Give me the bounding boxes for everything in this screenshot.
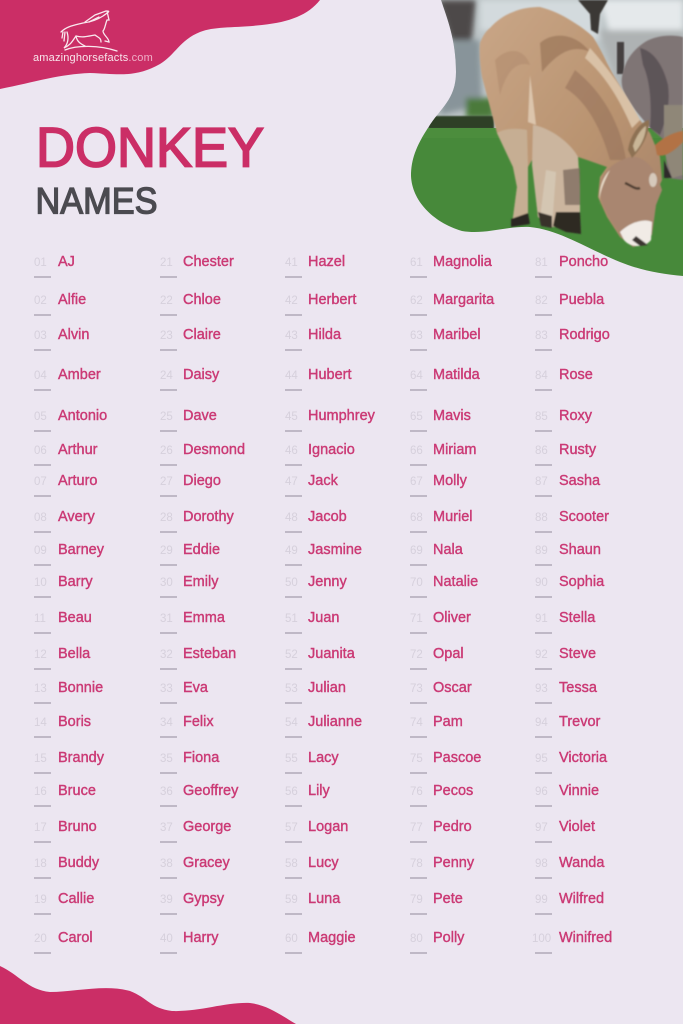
names column 3: 46 <box>285 445 298 457</box>
names column 1: Arturo <box>58 473 98 489</box>
names column 1: 20 <box>34 933 47 945</box>
names column 5: Poncho <box>559 254 608 270</box>
names column 2: Chester <box>183 254 234 270</box>
top banner <box>0 0 320 89</box>
names column 4: Opal <box>433 646 464 662</box>
names column 4: Pete <box>433 891 463 907</box>
names column 2: 22 <box>160 295 173 307</box>
names column 3: Logan <box>308 819 348 835</box>
names column 1: Bonnie <box>58 680 103 696</box>
names column 2: Eddie <box>183 542 220 558</box>
names column 5: 89 <box>535 545 548 557</box>
names column 1: Boris <box>58 714 91 730</box>
names column 2: Chloe <box>183 292 221 308</box>
names column 5: 83 <box>535 330 548 342</box>
names column 4: Oliver <box>433 610 471 626</box>
names column 1: 01 <box>34 257 47 269</box>
names column 3: Hazel <box>308 254 345 270</box>
names column 2: 23 <box>160 330 173 342</box>
names column 4: Pam <box>433 714 463 730</box>
names column 2: 29 <box>160 545 173 557</box>
names column 2: Desmond <box>183 442 245 458</box>
names column 1: 04 <box>34 370 47 382</box>
names column 4: 80 <box>410 933 423 945</box>
names column 4: Nala <box>433 542 463 558</box>
names column 1 <box>34 254 107 954</box>
names column 2: 27 <box>160 476 173 488</box>
bottom banner <box>0 966 296 1024</box>
names column 1: 13 <box>34 683 47 695</box>
names column 1: 18 <box>34 858 47 870</box>
names column 3: Luna <box>308 891 340 907</box>
names column 1: Avery <box>58 509 95 525</box>
names column 2: 30 <box>160 577 173 589</box>
names column 2 <box>160 254 245 954</box>
names column 4: 79 <box>410 894 423 906</box>
names column 3: Juan <box>308 610 339 626</box>
names column 1: Carol <box>58 930 93 946</box>
names column 3: Ignacio <box>308 442 355 458</box>
names column 2: 25 <box>160 411 173 423</box>
names column 2: Harry <box>183 930 218 946</box>
names column 5: 93 <box>535 683 548 695</box>
names column 5: 92 <box>535 649 548 661</box>
names column 3: 47 <box>285 476 298 488</box>
names column 2: Felix <box>183 714 214 730</box>
names column 4: 77 <box>410 822 423 834</box>
names column 2: Geoffrey <box>183 783 238 799</box>
names column 5: 85 <box>535 411 548 423</box>
names column 5: 82 <box>535 295 548 307</box>
names column 4: Penny <box>433 855 474 871</box>
names column 1: Brandy <box>58 750 104 766</box>
names column 1: Alvin <box>58 327 89 343</box>
names column 3: 53 <box>285 683 298 695</box>
names column 4: Pedro <box>433 819 472 835</box>
names column 2: Daisy <box>183 367 219 383</box>
names column 2: 36 <box>160 786 173 798</box>
names column 3: 56 <box>285 786 298 798</box>
names column 3: Maggie <box>308 930 356 946</box>
names column 5: 100 <box>532 933 551 945</box>
names column 3: 48 <box>285 512 298 524</box>
names column 5: 97 <box>535 822 548 834</box>
photo: donkeys grazing <box>405 0 683 278</box>
names column 1: AJ <box>58 254 75 270</box>
names column 1: 15 <box>34 753 47 765</box>
names column 4: 68 <box>410 512 423 524</box>
names column 1: Bruno <box>58 819 97 835</box>
names column 1: Bruce <box>58 783 96 799</box>
names column 3: 49 <box>285 545 298 557</box>
names column 2: 31 <box>160 613 173 625</box>
names column 2: Emily <box>183 574 218 590</box>
names column 3: 59 <box>285 894 298 906</box>
names column 5: 90 <box>535 577 548 589</box>
names column 4: Natalie <box>433 574 478 590</box>
names column 2: Gypsy <box>183 891 224 907</box>
names column 4: Oscar <box>433 680 472 696</box>
names column 3: 51 <box>285 613 298 625</box>
names column 3: 42 <box>285 295 298 307</box>
names column 4: 70 <box>410 577 423 589</box>
names column 2: 21 <box>160 257 173 269</box>
names column 2: 38 <box>160 858 173 870</box>
names column 5: Rodrigo <box>559 327 610 343</box>
names column 4: Molly <box>433 473 467 489</box>
names column 4: 64 <box>410 370 423 382</box>
names column 5: Rose <box>559 367 593 383</box>
names column 2: 34 <box>160 717 173 729</box>
names column 5: Victoria <box>559 750 607 766</box>
names column 1: Buddy <box>58 855 99 871</box>
names column 5: Tessa <box>559 680 597 696</box>
names column 3: 44 <box>285 370 298 382</box>
names column 5: 81 <box>535 257 548 269</box>
names column 4: Magnolia <box>433 254 492 270</box>
names column 5: 98 <box>535 858 548 870</box>
names column 1: Bella <box>58 646 90 662</box>
names column 3: 52 <box>285 649 298 661</box>
names column 1: 19 <box>34 894 47 906</box>
names column 4: 62 <box>410 295 423 307</box>
names column 4: 74 <box>410 717 423 729</box>
names column 3: Julianne <box>308 714 362 730</box>
names column 4: 66 <box>410 445 423 457</box>
names column 4: Polly <box>433 930 464 946</box>
names column 5: Wanda <box>559 855 604 871</box>
names column 3: 41 <box>285 257 298 269</box>
second donkey <box>622 36 683 180</box>
names column 1: Barry <box>58 574 93 590</box>
names column 1: 10 <box>34 577 47 589</box>
names column 1: Arthur <box>58 442 98 458</box>
names column 3 <box>285 254 376 954</box>
names column 3: Julian <box>308 680 346 696</box>
body and head mass <box>480 7 662 247</box>
names column 3: Hilda <box>308 327 341 343</box>
names column 5: Vinnie <box>559 783 599 799</box>
names column 5: Sasha <box>559 473 600 489</box>
names column 5: 99 <box>535 894 548 906</box>
names column 4: 73 <box>410 683 423 695</box>
names column 5: 84 <box>535 370 548 382</box>
names column 2: Fiona <box>183 750 219 766</box>
names column 3: 45 <box>285 411 298 423</box>
names column 2: Diego <box>183 473 221 489</box>
names column 5: Rusty <box>559 442 596 458</box>
names column 2: 39 <box>160 894 173 906</box>
names column 2: 40 <box>160 933 173 945</box>
names column 2: 24 <box>160 370 173 382</box>
names column 1: Barney <box>58 542 104 558</box>
names column 4: 78 <box>410 858 423 870</box>
names column 5: Scooter <box>559 509 609 525</box>
names column 5: 86 <box>535 445 548 457</box>
names column 4: 75 <box>410 753 423 765</box>
names column 2: 28 <box>160 512 173 524</box>
names column 3: 58 <box>285 858 298 870</box>
names column 2: Emma <box>183 610 225 626</box>
names column 3: Jenny <box>308 574 347 590</box>
names column 3: Lucy <box>308 855 339 871</box>
names column 1: Callie <box>58 891 94 907</box>
names column 5: Roxy <box>559 408 592 424</box>
names column 2: 32 <box>160 649 173 661</box>
names column 1: 16 <box>34 786 47 798</box>
names column 5: 94 <box>535 717 548 729</box>
names column 5: 96 <box>535 786 548 798</box>
names column 3: Juanita <box>308 646 355 662</box>
head <box>602 158 663 236</box>
names column 4: 61 <box>410 257 423 269</box>
names column 1: 06 <box>34 445 47 457</box>
names column 2: George <box>183 819 231 835</box>
names column 3: Jack <box>308 473 338 489</box>
names column 1: 03 <box>34 330 47 342</box>
names column 2: 33 <box>160 683 173 695</box>
legs <box>497 129 528 225</box>
names column 1: 05 <box>34 411 47 423</box>
names column 5: 88 <box>535 512 548 524</box>
names column 4: Margarita <box>433 292 494 308</box>
names column 4: 67 <box>410 476 423 488</box>
names column 5: Winifred <box>559 930 612 946</box>
names column 5: Stella <box>559 610 595 626</box>
names column 2: 37 <box>160 822 173 834</box>
names column 3: Jasmine <box>308 542 362 558</box>
names column 3: Lily <box>308 783 330 799</box>
names column 5: Sophia <box>559 574 604 590</box>
names column 4 <box>410 254 494 954</box>
names column 4: 63 <box>410 330 423 342</box>
names column 1: 17 <box>34 822 47 834</box>
names column 1: 11 <box>34 613 46 625</box>
names column 5: 91 <box>535 613 548 625</box>
names column 1: 09 <box>34 545 47 557</box>
names column 2: Gracey <box>183 855 230 871</box>
names column 4: Maribel <box>433 327 481 343</box>
logo text: amazinghorsefacts.com <box>33 52 153 64</box>
fur shading <box>540 36 590 72</box>
names column 5: Shaun <box>559 542 601 558</box>
names column 4: 71 <box>410 613 423 625</box>
names column 5: Puebla <box>559 292 604 308</box>
names column 4: Pascoe <box>433 750 481 766</box>
names column 1: Antonio <box>58 408 107 424</box>
names column 4: Matilda <box>433 367 480 383</box>
names column 4: Pecos <box>433 783 473 799</box>
names column 4: Mavis <box>433 408 471 424</box>
names column 2: Claire <box>183 327 221 343</box>
names column 1: 08 <box>34 512 47 524</box>
names column 5: Trevor <box>559 714 600 730</box>
names column 3: 43 <box>285 330 298 342</box>
names column 2: Dave <box>183 408 217 424</box>
names column 2: Esteban <box>183 646 236 662</box>
names column 4: 76 <box>410 786 423 798</box>
names column 3: 60 <box>285 933 298 945</box>
main donkey <box>480 7 683 247</box>
names column 2: Dorothy <box>183 509 234 525</box>
names column 3: 57 <box>285 822 298 834</box>
names column 1: 14 <box>34 717 47 729</box>
names column 1: 02 <box>34 295 47 307</box>
names column 3: Hubert <box>308 367 352 383</box>
names column 3: Jacob <box>308 509 347 525</box>
names column 4: 65 <box>410 411 423 423</box>
names column 1: 12 <box>34 649 47 661</box>
ears <box>628 120 649 158</box>
names column 3: Lacy <box>308 750 339 766</box>
names column 4: Muriel <box>433 509 472 525</box>
names column 4: 69 <box>410 545 423 557</box>
names column 5: Steve <box>559 646 596 662</box>
icon: horse <box>60 10 118 52</box>
names column 3: Herbert <box>308 292 356 308</box>
names column 1: Beau <box>58 610 92 626</box>
names column 2: Eva <box>183 680 208 696</box>
names column 3: Humphrey <box>308 408 375 424</box>
names column 5: Violet <box>559 819 595 835</box>
names column 2: 26 <box>160 445 173 457</box>
names column 1: Amber <box>58 367 101 383</box>
names column 4: Miriam <box>433 442 476 458</box>
names column 5: 87 <box>535 476 548 488</box>
logo: amazinghorsefacts.com <box>33 10 153 64</box>
names column 4: 72 <box>410 649 423 661</box>
names column 1: Alfie <box>58 292 86 308</box>
names column 5: 95 <box>535 753 548 765</box>
names column 5 <box>532 254 612 954</box>
names column 2: 35 <box>160 753 173 765</box>
names column 3: 50 <box>285 577 298 589</box>
names column 5: Wilfred <box>559 891 604 907</box>
names column 3: 54 <box>285 717 298 729</box>
names column 1: 07 <box>34 476 47 488</box>
names column 3: 55 <box>285 753 298 765</box>
